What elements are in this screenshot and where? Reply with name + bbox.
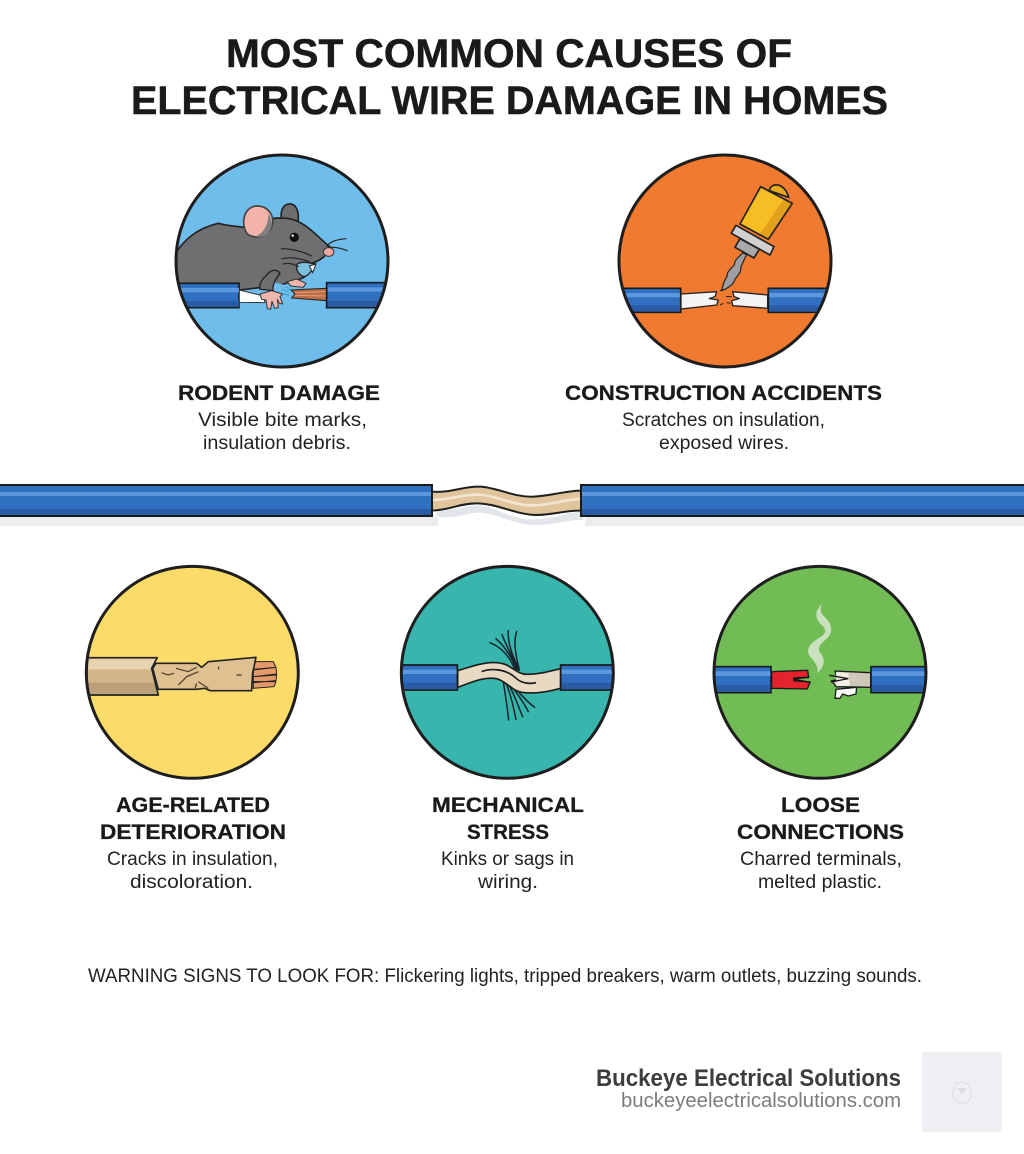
text block (198, 410, 367, 454)
divider wire with kink (0, 485, 1024, 526)
whiskers (281, 239, 347, 267)
heading: MECHANICAL (432, 793, 584, 817)
back ear (281, 204, 298, 223)
bit (722, 253, 747, 291)
icon: drill bit and cut wire (617, 155, 832, 367)
panel: loose connections (712, 566, 929, 893)
cracks (162, 667, 242, 688)
text block: Cracks in insulation, (107, 849, 278, 870)
collar (731, 225, 774, 255)
arm (260, 270, 280, 291)
insulated section (88, 658, 157, 694)
title: MOST COMMON CAUSES OF (226, 32, 792, 76)
text block: Scratches on insulation, (622, 410, 825, 431)
copper strands (253, 662, 277, 688)
footer brand (596, 1052, 1002, 1132)
heading: CONSTRUCTION ACCIDENTS (565, 381, 882, 405)
text block (107, 849, 278, 893)
panel: age-related deterioration (83, 566, 298, 893)
right wire (732, 292, 768, 308)
left wire (400, 665, 457, 690)
body (173, 218, 332, 290)
icon: kinked wire with frayed strands (400, 566, 617, 778)
text block: insulation debris. (203, 433, 351, 454)
left wire (617, 288, 681, 312)
text block: wiring. (477, 872, 538, 893)
icon: charred terminals with smoke (712, 566, 929, 778)
warning signs text: WARNING SIGNS TO LOOK FOR: Flickering lights, tripped breakers, warm outlets, buzzing sounds. (88, 966, 922, 987)
text block: discoloration. (130, 872, 253, 893)
ear (244, 206, 273, 237)
website: buckeyeelectricalsolutions.com (621, 1090, 901, 1112)
nose (323, 248, 334, 256)
panel: rodent damage (173, 155, 390, 454)
company name: Buckeye Electrical Solutions (596, 1065, 901, 1092)
heading: AGE-RELATED (116, 793, 270, 817)
title: ELECTRICAL WIRE DAMAGE IN HOMES (131, 79, 888, 123)
smoke (808, 604, 831, 673)
heading: CONNECTIONS (737, 820, 904, 844)
left segment (0, 485, 432, 516)
frayed insulation (153, 657, 256, 691)
text block (622, 410, 825, 454)
right segment (581, 485, 1024, 516)
text block (740, 849, 902, 893)
drill chuck (769, 185, 789, 197)
heading: RODENT DAMAGE (178, 381, 380, 405)
text block: Visible bite marks, (198, 410, 367, 431)
mouth (297, 262, 315, 277)
heading: STRESS (467, 820, 549, 844)
text block: exposed wires. (659, 433, 789, 454)
heading: DETERIORATION (100, 820, 286, 844)
heading (432, 793, 584, 844)
right wire (871, 667, 929, 693)
heading (100, 793, 286, 844)
left wire (712, 667, 771, 693)
text block: Kinks or sags in (441, 849, 574, 870)
twisted conductor (458, 663, 561, 693)
heading: LOOSE (781, 793, 860, 817)
logo tile (922, 1052, 1002, 1132)
left wire (173, 283, 239, 308)
right wire (561, 665, 617, 690)
melted terminal (835, 687, 857, 698)
text block (441, 849, 574, 893)
text block: Charred terminals, (740, 849, 902, 870)
panel: mechanical stress (400, 566, 617, 893)
icon: rat chewing wire (173, 155, 390, 367)
right wire (327, 283, 390, 308)
eye (290, 233, 299, 242)
panel: construction accidents (565, 155, 882, 454)
icon: cracked aged wire (83, 566, 298, 778)
gap under chest (274, 282, 284, 287)
text block: melted plastic. (758, 872, 882, 893)
title (131, 32, 888, 123)
paw (260, 291, 283, 309)
red terminal (772, 670, 810, 689)
strands (490, 631, 535, 720)
copper (291, 288, 327, 301)
heading (737, 793, 904, 844)
